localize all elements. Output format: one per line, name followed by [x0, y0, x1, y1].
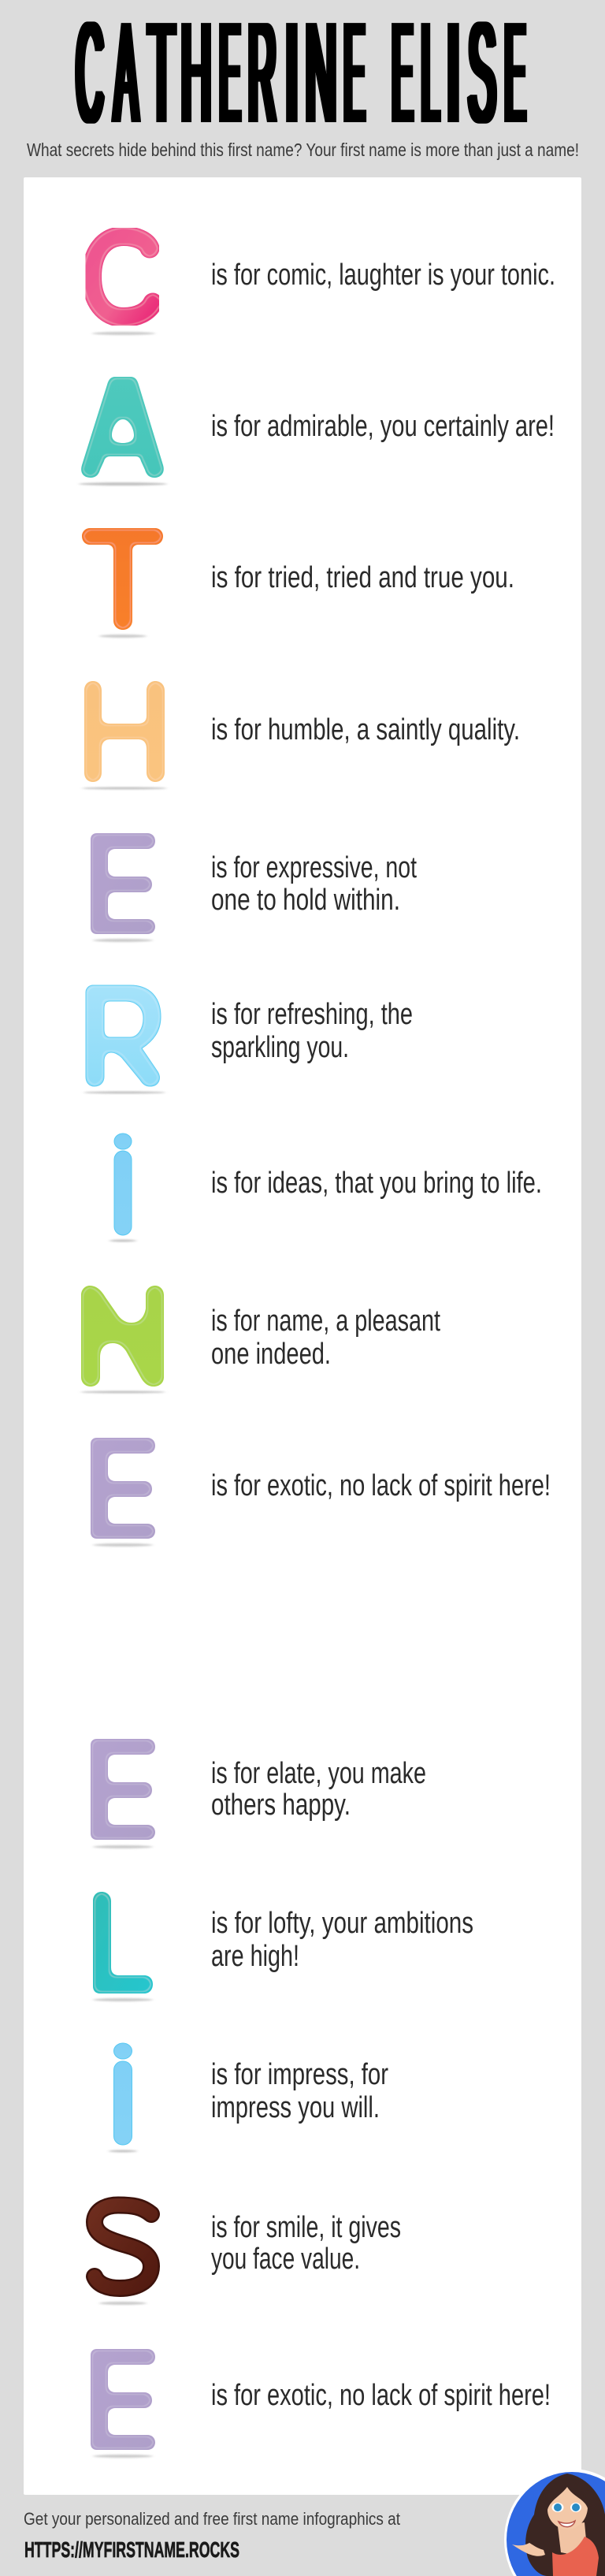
icon: letter S — [95, 2206, 151, 2305]
row: C for comic — [91, 236, 555, 335]
row: E for exotic (surname) — [91, 2349, 551, 2458]
icon: letter R — [84, 985, 165, 1094]
icon: letter I — [109, 1134, 136, 1242]
text: N lines: one indeed. — [211, 1338, 331, 1371]
text: R lines — [211, 998, 413, 1064]
text: H line: is for humble, a saintly quality. — [211, 713, 520, 746]
row: I for ideas — [109, 1134, 542, 1242]
icon: letter E — [91, 1739, 155, 1848]
text: N lines: is for name, a pleasant — [211, 1305, 440, 1338]
icon: avatar badge — [504, 2469, 605, 2576]
eyes — [551, 2503, 581, 2512]
text: E lines: is for expressive, not — [211, 851, 417, 884]
text: N lines — [211, 1305, 440, 1371]
mouth — [559, 2521, 575, 2527]
text: R lines: is for refreshing, the — [211, 998, 413, 1031]
row: E for exotic — [91, 1438, 551, 1547]
text: I lines: impress you will. — [211, 2091, 380, 2124]
text: L lines: are high! — [211, 1940, 299, 1973]
row: T for tried — [82, 528, 514, 638]
text: S lines — [211, 2211, 401, 2276]
text: E lines: is for elate, you make — [211, 1757, 426, 1790]
text: S lines: you face value. — [211, 2243, 360, 2276]
text: R lines: sparkling you. — [211, 1031, 349, 1064]
row: I for impress — [109, 2043, 388, 2152]
text: L lines — [211, 1907, 473, 1973]
footer text: Get your personalized and free first name infographics at — [24, 2509, 400, 2529]
icon: letter A — [79, 377, 167, 486]
icon: letter H — [82, 681, 167, 790]
icon: letter E — [91, 1438, 155, 1547]
icon: letter E — [91, 2349, 155, 2458]
neck — [558, 2522, 586, 2554]
icon: letter N — [80, 1286, 165, 1394]
row: N for name — [80, 1286, 440, 1394]
icon: letter E — [91, 833, 155, 942]
text: E lines — [211, 851, 417, 917]
row: E for expressive — [91, 833, 417, 942]
icon: letter I — [109, 2043, 137, 2152]
row: E for elate — [91, 1739, 426, 1848]
text: I lines — [211, 2058, 388, 2124]
hair — [525, 2474, 605, 2576]
hand — [512, 2543, 545, 2556]
red top — [552, 2537, 599, 2576]
text: E lines: one to hold within. — [211, 884, 400, 917]
text: I lines: is for impress, for — [211, 2058, 388, 2091]
text: E lines: others happy. — [211, 1789, 351, 1822]
icon: letter C — [91, 236, 155, 335]
row: L for lofty — [93, 1892, 473, 2001]
icon: letter L — [93, 1892, 153, 2001]
row: S for smile — [95, 2206, 401, 2305]
row: H for humble — [82, 681, 520, 790]
row: A for admirable — [79, 377, 555, 486]
row: R for refreshing — [84, 985, 413, 1094]
footer url: HTTPS://MYFIRSTNAME.ROCKS — [24, 2537, 239, 2562]
text: S lines: is for smile, it gives — [211, 2211, 401, 2244]
face — [547, 2487, 588, 2529]
icon: letter T — [82, 528, 163, 638]
text: T line: is for tried, tried and true you. — [211, 561, 514, 594]
text: E lines — [211, 1757, 426, 1822]
text: L lines: is for lofty, your ambitions — [211, 1907, 473, 1940]
